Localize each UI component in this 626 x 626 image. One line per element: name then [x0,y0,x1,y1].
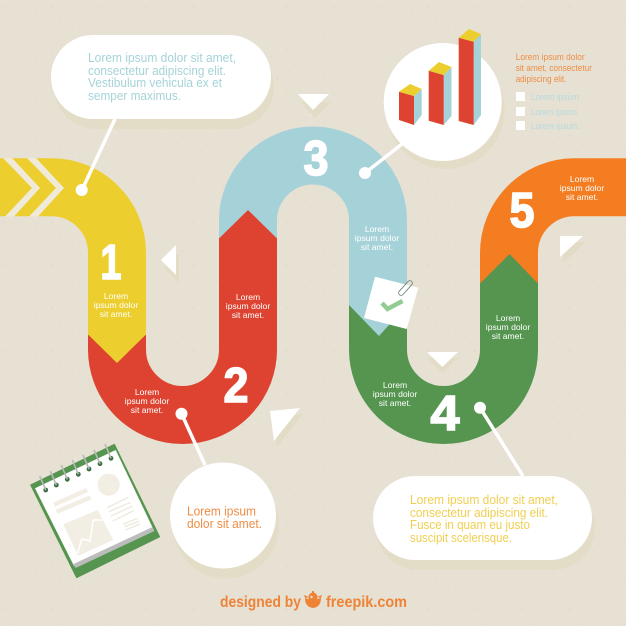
icon: freepik logo [304,591,322,608]
red arrow head [219,210,277,238]
road segment 3: blue [248,156,407,336]
step numbers: 2 [224,359,248,413]
bottom pill text: Fusce in quam eu justo [410,518,530,532]
callout: top pill [51,35,274,196]
callout: chart circle [359,29,505,179]
small circle text: dolor sit amet. [187,517,262,531]
step labels: Lorem [135,387,159,397]
step labels: ipsum dolor [125,396,169,406]
step labels: ipsum dolor [560,183,604,193]
paper clip [398,280,413,296]
step labels: sit amet. [566,192,598,202]
road segment 1: yellow [0,158,146,363]
step labels: sit amet. [100,309,132,319]
step labels [94,174,604,415]
green arrow head [480,254,538,284]
blue arrow head [349,305,407,336]
road segment 4: green [378,254,538,415]
notebook page content [54,474,140,556]
small circle text [187,504,262,531]
step labels: Lorem [496,313,520,323]
bottom pill text [410,493,558,545]
callout: small circle [170,408,279,578]
legend [516,92,580,131]
top pill text: Lorem ipsum dolor sit amet, [88,51,236,65]
road segment 2: red [117,210,277,415]
top pill text: semper maximus. [88,89,181,103]
step labels: sit amet. [492,331,524,341]
small circle text: Lorem ipsum [187,504,256,518]
step labels: ipsum dolor [94,300,138,310]
step labels: Lorem [236,292,260,302]
top right text and legend: Lorem ipsum dolor [516,52,585,62]
step labels: ipsum dolor [226,301,270,311]
icon: notebook [31,444,159,577]
legend: Lorem ipsum. [531,107,579,117]
top pill text [88,51,236,103]
step 5 number: 5 [510,184,534,238]
callout: bottom pill [373,402,595,570]
step labels: sit amet. [131,405,163,415]
road segment 5: orange [509,184,626,292]
top pill text: Vestibulum vehicula ex et [88,76,222,90]
triangle markers [161,94,586,447]
bottom pill text: Lorem ipsum dolor sit amet, [410,493,558,507]
freepik credit: freepik.com [326,594,407,611]
legend: Lorem ipsum [531,92,579,102]
legend: Lorem ipsum. [531,121,580,131]
step labels: Lorem [383,380,407,390]
step numbers: 3 [304,132,328,186]
step labels: sit amet. [379,398,411,408]
top right text and legend: sit amet, consectetur [516,63,592,73]
step labels: Lorem [365,224,389,234]
step numbers: 1 [100,236,122,290]
top right text and legend: adipiscing elit. [516,74,566,84]
step numbers: 4 [430,387,460,441]
check mark [382,301,402,309]
step labels: sit amet. [361,242,393,252]
freepik credit: designed by [220,594,301,611]
step labels: ipsum dolor [355,233,399,243]
notebook spiral [40,444,113,492]
chevrons [3,158,64,216]
top pill text: consectetur adipiscing elit. [88,64,226,78]
step labels: ipsum dolor [486,322,530,332]
top right text and legend [516,52,592,131]
bottom pill text: consectetur adipiscing elit. [410,506,548,520]
step labels: Lorem [570,174,594,184]
step labels: Lorem [104,291,128,301]
sticky note with check [364,277,418,329]
3D bar chart [399,29,481,125]
freepik credit [220,591,407,611]
bottom pill text: suscipit scelerisque. [410,531,512,545]
step labels: ipsum dolor [373,389,417,399]
step numbers [100,132,460,441]
yellow arrow head [88,334,146,363]
step labels: sit amet. [232,310,264,320]
